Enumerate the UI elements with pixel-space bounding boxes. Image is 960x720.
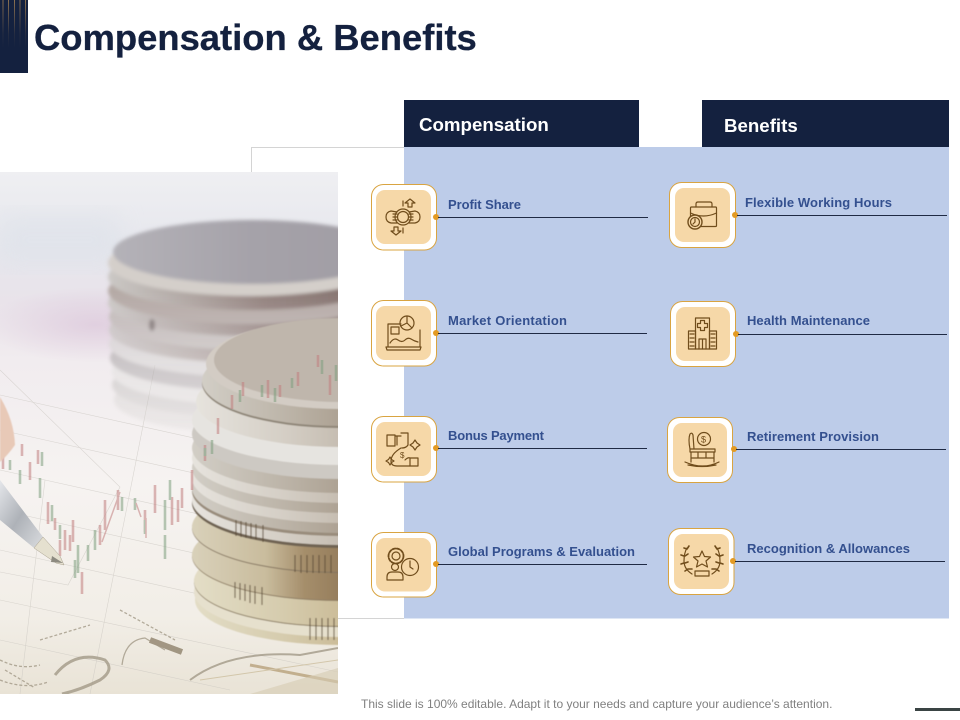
item: Health Maintenance	[670, 302, 947, 366]
banknote engravings	[0, 610, 338, 694]
candlestick chart overlay	[3, 355, 336, 594]
icon: hands exchanging dollar coin	[386, 199, 420, 235]
item: Retirement Provision	[668, 418, 946, 482]
title: Compensation & Benefits	[34, 17, 477, 58]
item: Global Programs & Evaluation: Global Programs & Evaluation	[448, 544, 635, 559]
item: Global Programs & Evaluation	[372, 532, 647, 597]
heading: Compensation	[404, 100, 639, 147]
icon: money bag and hands	[386, 433, 420, 466]
panel: blue background	[404, 147, 949, 618]
footer note: This slide is 100% editable. Adapt it to your needs and capture your audience’s attention.	[361, 697, 832, 711]
photo: coins and stock chart	[0, 172, 338, 694]
pen	[0, 480, 64, 565]
item: Profit Share	[372, 184, 648, 250]
item: Bonus Payment	[372, 416, 647, 482]
item: Recognition & Allowances	[668, 528, 945, 594]
finger	[0, 397, 15, 462]
icon: rocking chair with coin	[685, 432, 719, 466]
item: Market Orientation	[372, 300, 647, 366]
icon: money bag and hands: $	[400, 451, 405, 460]
item: Profit Share: Profit Share	[448, 197, 521, 212]
page marker bar	[915, 708, 960, 711]
item: Market Orientation: Market Orientation	[448, 313, 567, 328]
icon: hospital building	[688, 318, 716, 349]
header accent block	[0, 0, 28, 73]
icon: rocking chair with coin: $	[701, 434, 706, 444]
item: Flexible Working Hours: Flexible Working Hours	[745, 195, 892, 210]
icon: gear, person and clock	[387, 548, 418, 580]
item: Bonus Payment: Bonus Payment	[448, 428, 545, 443]
back coin stack	[106, 218, 338, 426]
icon: briefcase with clock	[688, 202, 716, 229]
heading: Benefits	[702, 100, 949, 147]
item: Retirement Provision: Retirement Provision	[747, 429, 879, 444]
front coin stack	[191, 318, 338, 646]
heading: Compensation: Compensation	[419, 114, 549, 135]
icon: laptop with pie chart	[386, 316, 421, 350]
item: Recognition & Allowances: Recognition & Allowances	[747, 541, 910, 556]
item: Flexible Working Hours	[670, 182, 947, 248]
outline frame behind photo	[252, 148, 404, 618]
icon: laurel wreath with star	[681, 546, 723, 576]
item: Health Maintenance: Health Maintenance	[747, 313, 870, 328]
heading: Benefits: Benefits	[724, 115, 798, 136]
